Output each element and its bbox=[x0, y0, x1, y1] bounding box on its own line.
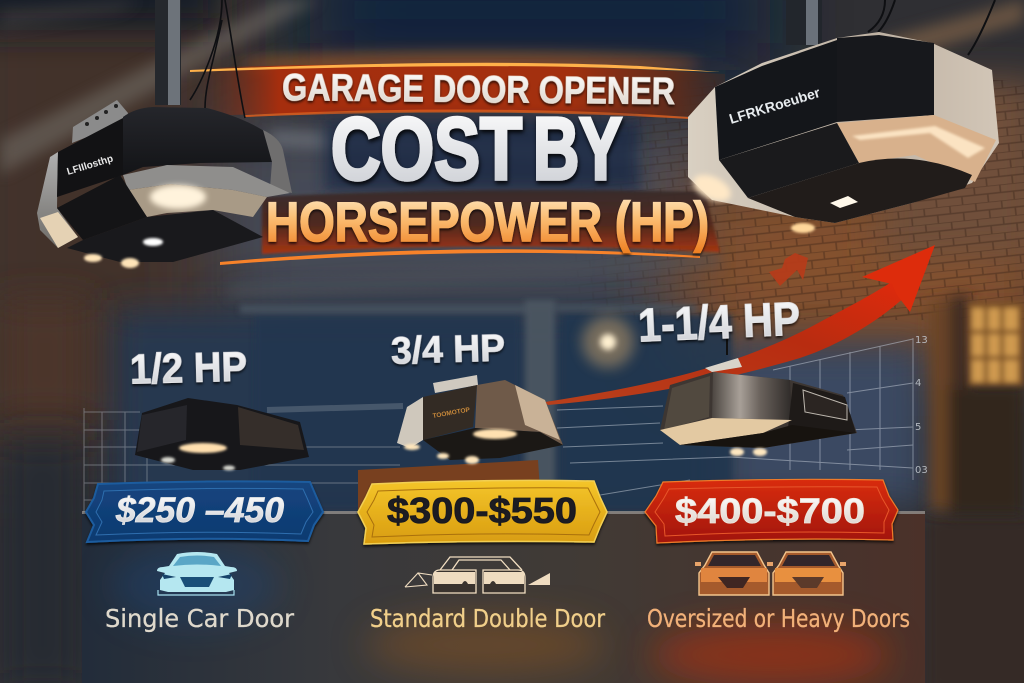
large opener: right bbox=[688, 0, 999, 233]
shadow base bbox=[158, 590, 234, 595]
cream outer shell bbox=[688, 32, 999, 223]
top red band bbox=[190, 52, 725, 119]
label: 1/2 HP: 1/2 HP bbox=[129, 343, 248, 393]
brand label: LFIIlosthp bbox=[66, 153, 115, 178]
price text: $300-$550 bbox=[387, 490, 577, 531]
under plate bbox=[748, 159, 972, 223]
black front face bbox=[715, 40, 837, 160]
arrow head bbox=[862, 245, 935, 312]
price text: $400-$700 bbox=[675, 492, 865, 531]
panel glow: red right bbox=[650, 623, 890, 683]
arrow curve bbox=[545, 276, 907, 405]
right orange car bbox=[773, 552, 846, 595]
panel glow: amber middle bbox=[365, 615, 605, 675]
center light bbox=[830, 196, 858, 208]
lower dark panel bbox=[82, 511, 925, 683]
small opener: 3/4 HP bbox=[397, 375, 563, 464]
background: brick wall texture bbox=[607, 80, 1024, 320]
silver right end bbox=[263, 130, 292, 193]
price text: $250 –450 bbox=[115, 491, 285, 530]
black right section bbox=[787, 383, 856, 437]
icon: single car bbox=[157, 552, 237, 595]
shared roof bbox=[440, 557, 522, 570]
glowing cream band bbox=[837, 115, 996, 182]
background: ceiling beams bbox=[0, 0, 1024, 297]
bottom bbox=[423, 428, 563, 460]
main light glow bbox=[150, 185, 206, 209]
background: warm lit window bbox=[968, 302, 1024, 386]
title banner bbox=[190, 52, 725, 265]
label: 1-1/4 HP: 1-1/4 HP bbox=[637, 292, 801, 352]
price badge: blue bbox=[86, 481, 323, 542]
lit corner bbox=[40, 212, 78, 248]
price badge: yellow bbox=[358, 480, 607, 544]
grille bbox=[180, 577, 214, 587]
right car bbox=[483, 570, 525, 593]
small opener: 1/2 HP bbox=[135, 398, 309, 470]
silver band bbox=[123, 165, 290, 197]
light bbox=[473, 429, 517, 439]
bottom red band bbox=[220, 190, 720, 265]
axis labels: 4 bbox=[915, 378, 921, 389]
right face bbox=[238, 407, 304, 450]
mounting rod bbox=[155, 0, 181, 105]
black front face bbox=[57, 118, 123, 197]
title line 2: BY bbox=[533, 99, 622, 198]
axis labels: 5 bbox=[915, 422, 921, 433]
background: wall lamp glow bbox=[582, 316, 634, 368]
label: 3/4 HP: 3/4 HP bbox=[390, 328, 506, 373]
label: oversized or heavy doors: Oversized or Heavy Doors bbox=[647, 604, 910, 633]
right door sketch bbox=[528, 573, 550, 585]
chart grid: left bbox=[84, 406, 403, 512]
bottom lights bbox=[161, 457, 235, 470]
bracket bbox=[705, 358, 742, 372]
small opener: 1-1/4 HP bbox=[660, 337, 857, 456]
bottom lights bbox=[404, 444, 479, 464]
headlights bbox=[162, 574, 232, 579]
title line 2: COST bbox=[331, 99, 522, 198]
cream left end bbox=[397, 397, 423, 448]
axis labels: 13 bbox=[915, 335, 928, 346]
downward glow bbox=[791, 223, 815, 233]
large opener: left bbox=[37, 0, 292, 268]
icon: two cars with doors bbox=[405, 557, 550, 593]
bracket bbox=[433, 375, 478, 393]
title line 1: GARAGE DOOR OPENER bbox=[282, 67, 675, 113]
title line 3: HORSEPOWER (HP) bbox=[266, 190, 709, 253]
bottom lights bbox=[730, 448, 767, 456]
windshield bbox=[173, 556, 221, 566]
chart grid: right with axis labels bbox=[557, 335, 928, 500]
left orange car bbox=[695, 552, 773, 595]
background: right pillar and dark door bbox=[930, 295, 1024, 515]
corner light bbox=[689, 170, 735, 206]
cables bbox=[868, 0, 995, 55]
brand label: TOOMOTOP bbox=[432, 406, 471, 420]
mounting bracket bbox=[72, 100, 128, 143]
panel glow: blue left bbox=[110, 545, 280, 625]
lit panel bbox=[515, 385, 560, 440]
brand label: LFRKRoeuber bbox=[727, 84, 822, 127]
car body bbox=[157, 552, 237, 592]
mounting rod bbox=[786, 0, 822, 45]
icon: two orange cars bbox=[695, 552, 846, 595]
axis labels: 03 bbox=[915, 465, 928, 476]
left door sketch bbox=[405, 573, 432, 587]
dark middle band bbox=[325, 120, 640, 190]
black face bbox=[423, 385, 477, 440]
black dome bbox=[837, 35, 934, 122]
cables bbox=[190, 0, 245, 118]
lower left black bbox=[57, 175, 147, 240]
silver left end bbox=[37, 152, 78, 248]
axis labels bbox=[915, 335, 928, 476]
body bbox=[135, 398, 309, 470]
brown door panel behind yellow badge bbox=[358, 460, 540, 510]
window bbox=[803, 390, 847, 420]
outer body bbox=[660, 372, 857, 448]
left car bbox=[433, 570, 476, 593]
background: garage door frames bbox=[240, 300, 732, 515]
small arrow fragment bbox=[769, 253, 808, 286]
bottom plate bbox=[67, 210, 263, 262]
label: standard double door: Standard Double Door bbox=[370, 604, 606, 633]
antenna bbox=[726, 337, 728, 355]
tan dome bbox=[475, 380, 563, 445]
cream band bbox=[660, 418, 792, 445]
black dome bbox=[123, 107, 272, 175]
bottom lights bbox=[84, 238, 163, 268]
rising red arrow bbox=[545, 245, 935, 405]
label: single car door: Single Car Door bbox=[105, 604, 295, 633]
bottom bbox=[680, 425, 856, 448]
left face bbox=[137, 405, 187, 452]
light bbox=[179, 443, 227, 453]
dome bbox=[712, 372, 792, 420]
left face bbox=[664, 376, 710, 430]
light strip bbox=[852, 126, 985, 158]
front lower black bbox=[719, 123, 859, 198]
price badge: red bbox=[645, 479, 898, 543]
glowing cream band bbox=[128, 184, 267, 217]
